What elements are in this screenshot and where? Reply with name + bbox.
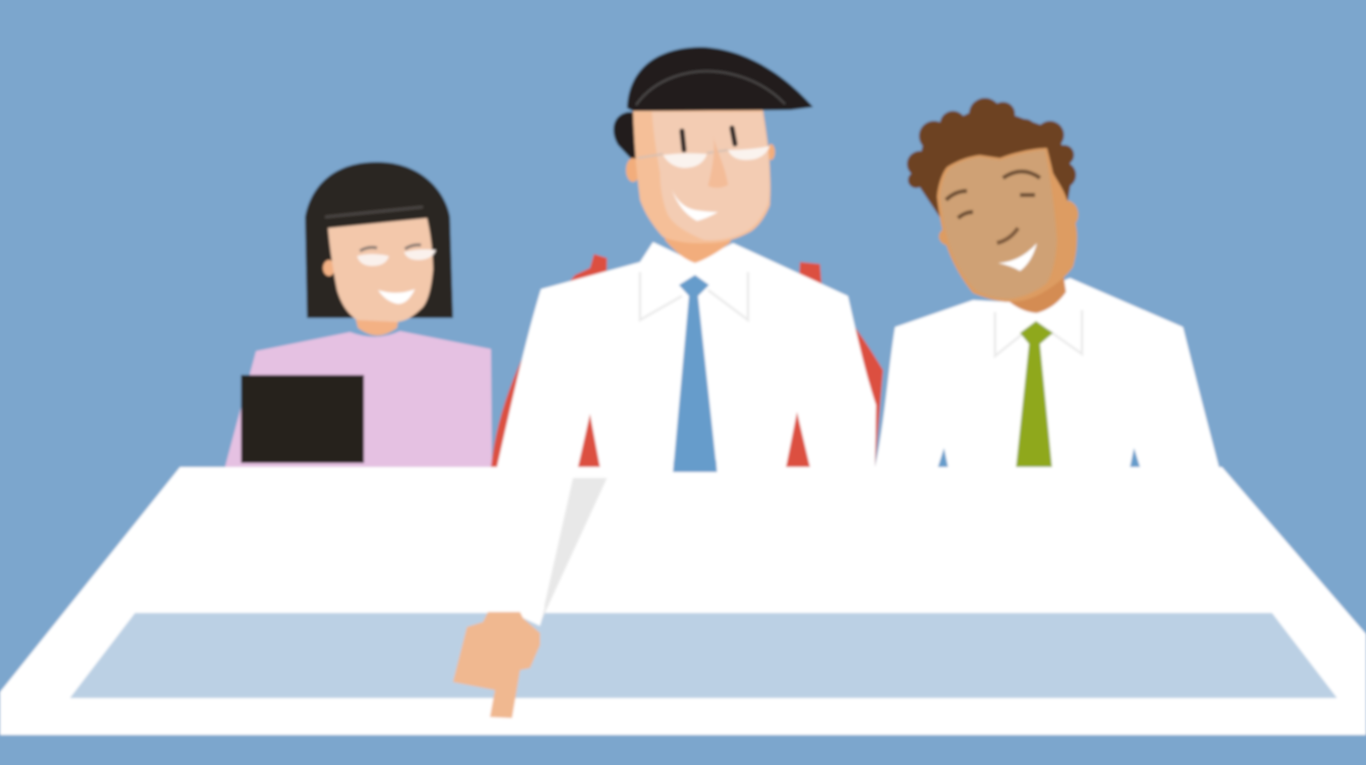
woman brows: [360, 245, 421, 251]
man sleeve cuff: [515, 606, 545, 626]
woman glasses: [357, 249, 436, 266]
table inset panel: [70, 613, 1337, 698]
man tie: [673, 275, 717, 472]
man eyes: [682, 128, 735, 150]
man hand pointing: [453, 612, 540, 718]
red chair: [491, 254, 883, 467]
man hair highlight: [636, 71, 785, 105]
man face: [633, 110, 770, 243]
woman neck front: [357, 318, 398, 336]
tie end over table: [673, 460, 717, 472]
man arm fold shadow: [540, 478, 607, 625]
right man hair: [907, 98, 1076, 222]
man lighter face area: [652, 112, 769, 240]
right man shirt folds: [938, 448, 1140, 467]
table: [0, 467, 1366, 735]
man smile: [672, 190, 718, 221]
man back hair: [613, 112, 642, 164]
woman fringe highlight: [325, 207, 423, 217]
person: woman in pink with tablet: [225, 162, 492, 467]
right man brows: [946, 172, 1040, 200]
man ear left: [626, 158, 640, 182]
man ear right: [767, 144, 775, 160]
woman face: [328, 218, 433, 322]
man glasses: [638, 146, 770, 168]
bottom band: [0, 735, 1366, 765]
tablet: [241, 375, 364, 463]
right man eyes: [958, 195, 1035, 218]
man shirt gaps: [578, 412, 810, 467]
right man tie: [1016, 321, 1053, 467]
man neck: [665, 236, 732, 263]
right man neck: [1005, 272, 1066, 313]
right man face: [937, 148, 1077, 302]
right man smile: [998, 243, 1037, 271]
man nose: [708, 135, 728, 188]
right man shirt: [875, 278, 1219, 467]
woman sweater: [225, 331, 492, 467]
person: man at centre with blue tie: [491, 47, 883, 472]
woman neck: [355, 316, 399, 335]
man hair: [627, 47, 813, 111]
woman ear: [323, 260, 335, 276]
woman hair: [305, 162, 453, 318]
man collar: [640, 272, 748, 320]
man shirt: [497, 242, 876, 467]
right man ears: [939, 200, 1078, 246]
right man lighter face area: [940, 150, 1057, 299]
right man nose: [997, 228, 1018, 243]
woman smile: [378, 289, 415, 304]
person: man at right with green tie: [875, 98, 1219, 467]
right man collar: [995, 310, 1082, 356]
